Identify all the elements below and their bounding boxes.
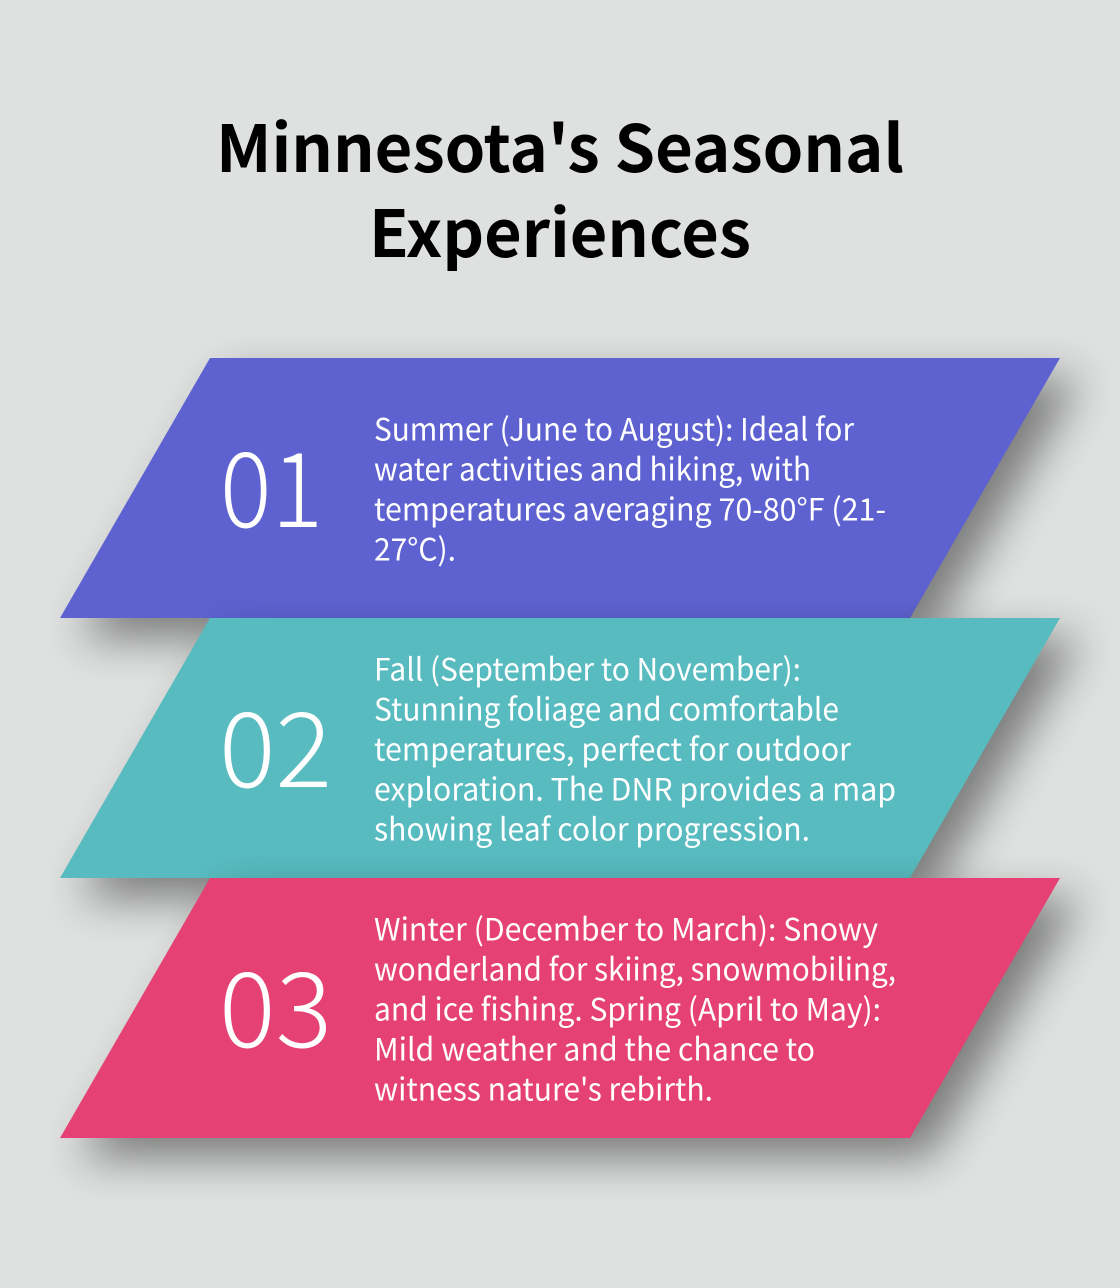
parallelogram: winter and spring: [60, 878, 1060, 1138]
text: fall: Stunning foliage and comfortable: [374, 684, 839, 730]
text: winter and spring: Mild weather and the chance to: [374, 1024, 815, 1070]
number 03: 03: [219, 926, 332, 1077]
title: Experiences: [369, 182, 751, 276]
text: fall: showing leaf color progression.: [374, 804, 810, 850]
text: fall: temperatures, perfect for outdoor: [374, 724, 852, 770]
text: fall: exploration. The DNR provides a map: [374, 764, 896, 810]
title: [216, 97, 904, 276]
text: fall: Fall (September to November):: [374, 644, 801, 690]
panel: fall: [60, 618, 1080, 898]
parallelogram: summer: [60, 358, 1060, 618]
text: winter and spring: [374, 904, 896, 1110]
text: fall: [374, 644, 896, 850]
panel: winter and spring: [60, 878, 1080, 1158]
panel: summer: [60, 358, 1080, 638]
text: summer: Summer (June to August): Ideal for: [374, 404, 855, 450]
number 01: 01: [220, 406, 323, 557]
number 02: 02: [219, 666, 332, 817]
text: winter and spring: wonderland for skiing, snowmobiling,: [374, 944, 896, 990]
text: summer: water activities and hiking, with: [374, 444, 811, 490]
title: Minnesota's Seasonal: [216, 97, 904, 191]
text: winter and spring: witness nature's rebirth.: [374, 1064, 713, 1110]
text: winter and spring: and ice fishing. Spring (April to May):: [374, 984, 881, 1030]
parallelogram: fall: [60, 618, 1060, 878]
text: summer: 27°C).: [374, 524, 456, 570]
text: winter and spring: Winter (December to March): Snowy: [374, 904, 878, 950]
text: summer: [374, 404, 886, 570]
text: summer: temperatures averaging 70-80°F (21-: [374, 484, 886, 530]
